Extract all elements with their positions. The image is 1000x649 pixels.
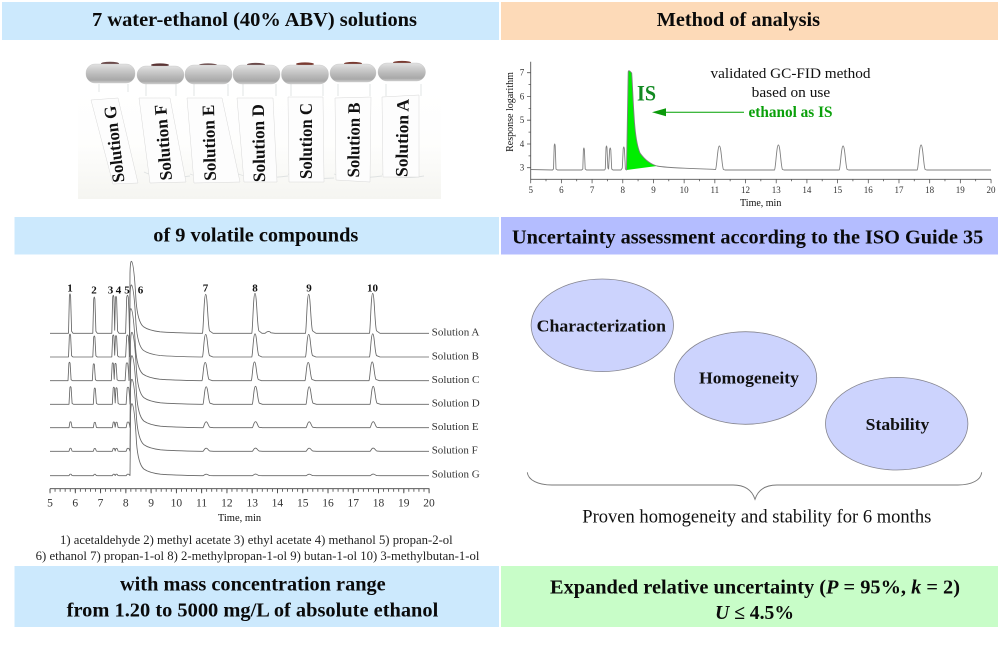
heading: uncertainty assessment	[501, 217, 998, 254]
ellipse: homogeneity	[674, 332, 817, 424]
vial label text: Solution D	[248, 104, 269, 182]
method description: validated GC-FID method	[710, 65, 871, 82]
compound legend	[36, 533, 480, 563]
ellipse: characterization: Characterization	[537, 317, 667, 336]
x tick labels	[528, 185, 996, 195]
time axis: 13	[246, 498, 258, 510]
x tick labels: 19	[956, 185, 965, 195]
heading: 7 water-ethanol solutions: 7 water-ethanol (40% ABV) solutions	[92, 9, 417, 31]
y tick labels: 6	[520, 91, 525, 101]
axes	[527, 62, 992, 181]
time axis	[47, 489, 435, 524]
heading: of 9 volatile compounds: of 9 volatile compounds	[153, 224, 358, 246]
compound legend: 6) ethanol 7) propan-1-ol 8) 2-methylpropan-1-ol 9) butan-1-ol 10) 3-methylbutan-1-ol	[36, 549, 480, 563]
ethanol peak fill	[626, 71, 657, 170]
banner: expanded uncertainty	[501, 566, 998, 627]
y tick labels: 4	[520, 139, 525, 149]
time axis: 11	[196, 498, 207, 510]
heading: uncertainty assessment: Uncertainty assessment according to the ISO Guide 35	[512, 226, 983, 248]
x tick labels: 14	[802, 185, 812, 195]
x tick labels: 6	[559, 185, 564, 195]
vial glass bodies	[99, 84, 424, 178]
photo: seven labelled vials	[78, 61, 441, 199]
vial label text: Solution B	[343, 102, 364, 178]
x tick labels: 9	[651, 185, 656, 195]
x tick labels: 13	[772, 185, 781, 195]
trace: solution A	[50, 261, 429, 333]
peak numbers: 10	[367, 282, 378, 294]
solution labels	[432, 327, 480, 481]
time axis: Time, min	[218, 513, 262, 524]
peak numbers: 5	[124, 284, 130, 296]
trace: solution C	[50, 309, 429, 381]
chromatogram trace	[531, 71, 991, 170]
silver caps	[86, 61, 426, 84]
method description: ethanol as IS	[748, 104, 832, 121]
banner: mass concentration range	[14, 566, 499, 627]
peak numbers: 3	[108, 284, 114, 296]
time axis: 9	[148, 498, 154, 510]
method description	[710, 65, 871, 121]
time axis: 12	[221, 498, 233, 510]
ellipse: characterization	[531, 279, 674, 372]
label: IS: IS	[637, 81, 656, 106]
vial label text: Solution E	[198, 104, 220, 181]
banner: mass concentration range: from 1.20 to 5000 mg/L of absolute ethanol	[67, 600, 439, 622]
x tick labels: 5	[528, 185, 533, 195]
chart: stacked chromatograms of solutions A to G	[47, 261, 480, 524]
vial labels	[91, 95, 419, 184]
ellipse: stability: Stability	[866, 415, 930, 434]
peak numbers: 4	[116, 284, 122, 296]
banner: expanded uncertainty: U ≤ 4.5%	[715, 602, 794, 624]
solution labels: Solution E	[432, 421, 479, 433]
solution labels: Solution D	[432, 398, 480, 410]
x tick labels: 20	[986, 185, 996, 195]
vial label text: Solution C	[296, 103, 316, 179]
time axis: 17	[348, 498, 359, 510]
y tick labels: 7	[520, 68, 525, 78]
peak numbers: 8	[252, 282, 258, 294]
trace: solution F	[50, 379, 429, 451]
method description: based on use	[752, 84, 830, 101]
x tick labels: 10	[680, 185, 689, 195]
peak numbers: 1	[67, 282, 73, 294]
x axis title: Time, min	[740, 198, 781, 209]
chart: GC-FID chromatogram with ethanol as internal standard	[505, 62, 996, 209]
x tick labels: 11	[710, 185, 719, 195]
ellipse: stability	[826, 377, 968, 470]
trace: solution E	[50, 356, 429, 428]
time axis: 6	[72, 498, 78, 510]
x tick labels: 17	[894, 185, 904, 195]
peak numbers: 7	[203, 282, 209, 294]
time axis: 16	[322, 498, 334, 510]
banner: expanded uncertainty: Expanded relative uncertainty (P = 95%, k = 2)	[550, 576, 960, 598]
time axis: 18	[373, 498, 384, 510]
solution labels: Solution C	[432, 374, 479, 386]
y tick labels	[520, 68, 525, 172]
compound legend: 1) acetaldehyde 2) methyl acetate 3) ethyl acetate 4) methanol 5) propan-2-ol	[60, 533, 453, 547]
peak numbers	[67, 282, 378, 296]
y tick labels: 3	[520, 162, 525, 172]
vial label text: Solution F	[150, 104, 176, 181]
solution labels: Solution G	[432, 469, 480, 481]
peak numbers: 6	[138, 284, 144, 296]
arrow: to IS peak	[652, 108, 744, 116]
time axis: 7	[98, 498, 104, 510]
y axis title: Response logarithm	[505, 72, 516, 152]
trace: solution G	[50, 404, 429, 476]
vial label text	[100, 98, 413, 184]
brace	[527, 472, 982, 499]
time axis: 5	[47, 498, 53, 510]
solution labels: Solution F	[432, 445, 478, 457]
solution labels: Solution A	[432, 327, 479, 339]
banner: mass concentration range: with mass concentration range	[120, 574, 386, 596]
heading: method of analysis: Method of analysis	[657, 9, 820, 31]
y tick labels: 5	[520, 115, 525, 125]
peak numbers: 2	[91, 284, 97, 296]
x tick labels: 18	[925, 185, 935, 195]
time axis: 15	[297, 498, 309, 510]
vial label text: Solution G	[100, 104, 128, 184]
time axis: 14	[272, 498, 283, 510]
ellipse: homogeneity: Homogeneity	[699, 368, 800, 387]
conclusion text: Proven homogeneity and stability for 6 months	[582, 507, 931, 527]
heading: 7 water-ethanol solutions	[2, 2, 499, 40]
heading: method of analysis	[501, 2, 998, 40]
x tick labels: 16	[864, 185, 873, 195]
time axis: 20	[423, 498, 435, 510]
x tick labels: 7	[590, 185, 595, 195]
heading: of 9 volatile compounds	[14, 217, 499, 254]
x tick labels: 15	[833, 185, 843, 195]
time axis: 10	[171, 498, 182, 510]
trace: solution B	[50, 285, 429, 357]
solution labels: Solution B	[432, 350, 479, 362]
x tick labels: 12	[741, 185, 750, 195]
time axis: 19	[398, 498, 410, 510]
x tick labels: 8	[621, 185, 626, 195]
time axis: 8	[123, 498, 129, 510]
trace: solution D	[50, 332, 429, 404]
peak numbers: 9	[306, 282, 312, 294]
vial label text: Solution A	[391, 98, 413, 177]
